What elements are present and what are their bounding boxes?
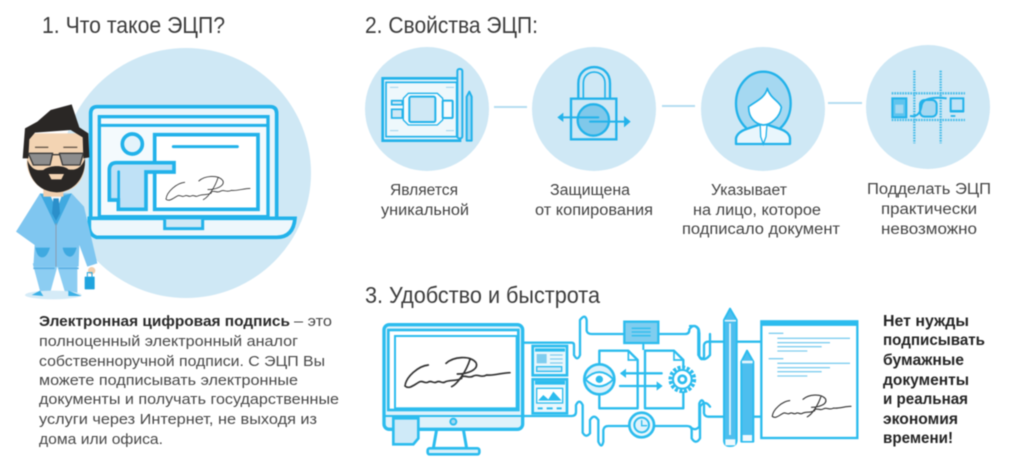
- caption 4: практически: [881, 201, 977, 218]
- circle 2 background: [532, 47, 656, 171]
- text block: definition: можете подписывать электронные: [39, 372, 298, 389]
- legs: [33, 263, 77, 293]
- text block: definition: дома или офиса.: [39, 431, 163, 448]
- text block: time saving callout: документы: [883, 372, 969, 389]
- icon: signed document: [761, 321, 857, 438]
- signature: [166, 176, 250, 200]
- text block: time saving callout: подписывать: [883, 332, 985, 349]
- connector 3: [828, 102, 862, 104]
- circle 4 background: [866, 45, 990, 169]
- caption 2: [535, 182, 653, 219]
- connector 1: [494, 106, 527, 108]
- caption 3: Указывает: [711, 182, 787, 199]
- caption 4: Подделать ЭЦП: [867, 181, 991, 198]
- caption 1: [381, 182, 469, 219]
- jacket: [16, 193, 97, 267]
- text block: definition: собственноручной подписи. С ЭЦП Вы: [39, 353, 325, 370]
- caption 4: невозможно: [881, 221, 977, 238]
- text block: definition: полноценный электронный аналог: [39, 333, 299, 350]
- caption 3: [682, 182, 840, 238]
- caption 4: [867, 181, 991, 238]
- connector 2: [662, 105, 695, 107]
- neck and face: [43, 182, 63, 197]
- panel: convenience illustration: [384, 309, 857, 454]
- glasses: [28, 153, 83, 165]
- text block: time saving callout: времени!: [883, 430, 953, 447]
- text block: time saving callout: экономия: [883, 411, 958, 428]
- icon: laptop with signature: [89, 107, 295, 237]
- panel: property circles: [365, 45, 991, 238]
- circle 1 background: [365, 47, 489, 171]
- text block: definition: услуги через Интернет, не выходя из: [39, 411, 317, 428]
- icon: unique document with stylus: [383, 69, 472, 141]
- heading: section 2: 2. Свойства ЭЦП:: [365, 12, 538, 38]
- text block: definition: – это: [294, 313, 332, 330]
- caption 1: уникальной: [381, 202, 469, 219]
- icon: connected web panels: [523, 317, 710, 445]
- text block: definition: Электронная цифровая подпись: [39, 313, 290, 330]
- text block: time saving callout: и реальная: [883, 391, 968, 408]
- icon: protected circuit: [892, 71, 965, 143]
- character: man in blue suit: [16, 104, 97, 299]
- icon: pencils and connecting lines: [690, 309, 761, 446]
- hand with bag: [88, 267, 95, 274]
- heading: section 3: 3. Удобство и быстрота: [365, 282, 600, 308]
- caption 3: на лицо, которое: [693, 202, 821, 219]
- caption 3: подписало документ: [682, 221, 840, 238]
- beard: [27, 158, 85, 192]
- text block: definition: документы и получать государственные: [39, 391, 339, 408]
- caption 2: Защищена: [550, 182, 630, 199]
- background circle: [61, 48, 311, 298]
- icon: person portrait: [736, 72, 791, 144]
- text block: time saving callout: бумажные: [883, 352, 964, 369]
- icon: desktop monitor with signature: [384, 325, 523, 454]
- hair: [23, 104, 89, 158]
- panel: what is a digital signature illustration: [16, 48, 311, 299]
- icon: lock with arrows: [557, 67, 631, 139]
- heading: section 1: 1. Что такое ЭЦП?: [42, 12, 225, 38]
- text block: definition: [39, 313, 339, 448]
- caption 1: Является: [390, 182, 458, 199]
- text block: time saving callout: [883, 313, 985, 447]
- circle 3 background: [701, 47, 825, 171]
- caption 2: от копирования: [535, 202, 653, 219]
- text block: time saving callout: Нет нужды: [883, 313, 969, 330]
- sticky note: [393, 418, 418, 444]
